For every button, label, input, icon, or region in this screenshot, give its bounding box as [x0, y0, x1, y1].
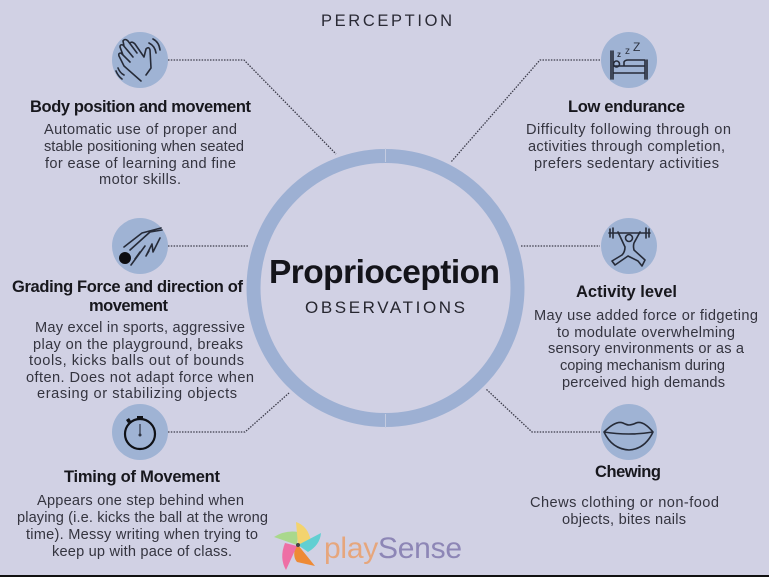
text: activity level: coping mechanism during: [560, 358, 725, 374]
heading: grading force: [12, 278, 244, 315]
text: timing of movement: keep up with pace of class.: [52, 544, 232, 560]
heading: low endurance: Low endurance: [568, 98, 685, 116]
text: chewing: objects, bites nails: [562, 512, 686, 528]
icon: bed: [601, 32, 657, 88]
text: grading force: tools, kicks balls out of bounds: [29, 353, 244, 369]
icon: waving hand: [112, 32, 168, 88]
icon: lips: [601, 404, 657, 460]
text: body position: for ease of learning and fine: [45, 156, 236, 172]
heading: body position: Body position and movement: [30, 98, 252, 116]
text: grading force: play on the playground, breaks: [33, 337, 243, 353]
heading: chewing: Chewing: [595, 463, 661, 481]
text: low endurance: prefers sedentary activities: [534, 156, 719, 172]
icon: stopwatch: [112, 404, 168, 460]
text: grading force: erasing or stabilizing objects: [37, 386, 237, 402]
text: body position: stable positioning when seated: [44, 139, 244, 155]
text: grading force: often. Does not adapt force when: [26, 370, 254, 386]
text: low endurance: [526, 122, 731, 172]
text: timing of movement: playing (i.e. kicks the ball at the wrong: [17, 510, 268, 526]
text: timing of movement: Appears one step behind when: [37, 493, 244, 509]
connector lines: [168, 60, 600, 432]
text: grading force: [26, 320, 254, 402]
heading: grading force: movement: [89, 297, 168, 315]
icon: bed: z: [625, 46, 630, 57]
heading: grading force: Grading Force and direction of: [12, 278, 244, 296]
text: timing of movement: [17, 493, 268, 560]
central heading: Proprioception: [269, 254, 500, 291]
text: activity level: May use added force or fidgeting: [534, 308, 758, 324]
title: perception: PERCEPTION: [321, 12, 452, 30]
text: low endurance: Difficulty following through on: [526, 122, 731, 138]
icon: ball with force: [112, 218, 168, 274]
text: chewing: Chews clothing or non-food: [530, 495, 719, 511]
text: activity level: [534, 308, 758, 391]
heading: timing of movement: Timing of Movement: [64, 468, 220, 486]
central subheading: OBSERVATIONS: [305, 298, 465, 317]
logo: playSense: [274, 522, 462, 570]
icon: bed: Z: [633, 40, 640, 54]
text: body position: motor skills.: [99, 172, 181, 188]
text: body position: Automatic use of proper and: [44, 122, 237, 138]
text: timing of movement: time). Messy writing when trying to: [26, 527, 258, 543]
text: body position: [44, 122, 244, 188]
heading: activity level: Activity level: [576, 283, 677, 301]
text: activity level: perceived high demands: [562, 375, 725, 391]
text: chewing: [530, 495, 719, 528]
text: grading force: May excel in sports, aggressive: [35, 320, 245, 336]
logo wordmark: playSense: [324, 532, 462, 565]
icon: bed: z: [617, 50, 621, 59]
text: activity level: sensory environments or as a: [548, 341, 745, 357]
icon: weightlifter: [601, 218, 657, 274]
icon: pinwheel: [274, 522, 321, 570]
text: activity level: to modulate overwhelming: [557, 325, 735, 341]
central ring: [254, 148, 518, 428]
text: low endurance: activities through completion,: [528, 139, 725, 155]
